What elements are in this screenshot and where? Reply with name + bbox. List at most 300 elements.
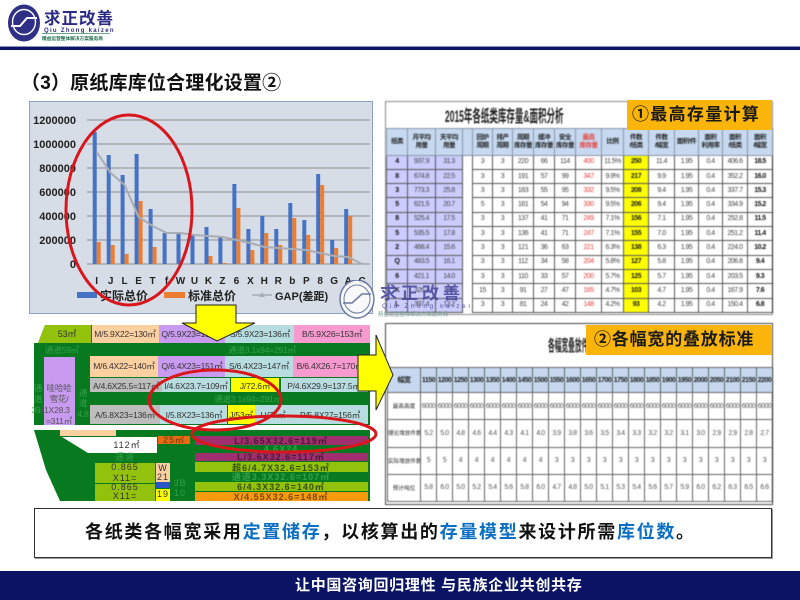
stacking standard table: 3	[747, 457, 750, 464]
storage analysis table: 件数	[656, 134, 668, 141]
stacking standard table: 1250	[454, 377, 467, 384]
stacking standard table: 4.8	[568, 484, 577, 491]
storage analysis table: 用量	[443, 142, 455, 149]
category labels: G	[330, 276, 338, 287]
storage analysis table: 71	[562, 215, 568, 222]
stacking standard table: 1350	[486, 377, 499, 384]
stacking standard table: 5.6	[504, 484, 513, 491]
storage analysis table: 217	[631, 172, 641, 180]
title: （3）原纸库库位合理化设置②	[21, 73, 281, 94]
storage analysis table: 8	[395, 215, 399, 222]
floor plan: upper section: J/53㎡	[229, 410, 253, 420]
storage analysis table: 0.4	[706, 273, 715, 280]
storage analysis table: 7.1	[657, 215, 666, 222]
storage analysis table: 773.3	[414, 187, 429, 194]
stacking standard table: 6000	[422, 403, 435, 410]
storage analysis table: 5.7%	[606, 273, 619, 280]
storage analysis table: 483.5	[414, 258, 429, 265]
stacking standard table: 6000	[454, 403, 467, 410]
storage analysis table: 面积	[704, 134, 716, 141]
storage analysis table: 5	[395, 230, 399, 237]
table panel: stacking standard	[386, 324, 772, 504]
stacking standard table: 2.9	[712, 430, 721, 437]
category labels: H	[261, 276, 268, 287]
storage analysis table: 468.4	[414, 244, 429, 251]
storage analysis table	[385, 127, 774, 314]
storage analysis table: 0.4	[706, 158, 715, 165]
storage analysis table: 114	[560, 158, 570, 165]
stacking standard table: 3.8	[568, 430, 577, 437]
storage analysis table: 面积/件	[677, 138, 696, 145]
storage analysis table: 15	[479, 287, 486, 294]
storage analysis table: 203.5	[727, 273, 743, 280]
GAP line	[97, 152, 362, 264]
stacking standard table: 5.3	[616, 484, 625, 491]
stacking standard table: 6.0	[696, 484, 705, 491]
storage analysis table: 7.1%	[606, 230, 619, 237]
storage analysis table: 525.4	[414, 215, 429, 222]
floor plan: upper section: S/5.9X23=136㎡	[230, 329, 291, 339]
stacking standard table: 最高高度	[393, 404, 415, 410]
storage analysis table: /纸类	[629, 142, 643, 149]
storage analysis table: 3	[481, 215, 484, 222]
floor plan: upper section: M/5.9X22=130㎡	[94, 329, 156, 339]
stacking standard table: 2200	[758, 377, 771, 384]
floor plan: upper section: A/4.6X25.5=117㎡	[93, 381, 160, 391]
storage analysis table: 58	[562, 258, 568, 265]
floor plan: lower section	[34, 430, 370, 502]
storage analysis table: 204	[583, 258, 594, 265]
stacking standard table: 1650	[582, 377, 595, 384]
stacking standard table: 3.6	[584, 430, 593, 437]
category labels: 6	[234, 276, 240, 287]
table title: 2015年各纸类库存量&面积分析	[445, 107, 564, 126]
storage analysis table: 621.5	[414, 201, 429, 208]
stacking standard table: 1400	[502, 377, 515, 384]
storage analysis table: 57	[541, 172, 547, 180]
legend	[77, 288, 328, 303]
storage analysis table: 14.0	[443, 273, 455, 280]
floor plan: lower section: L/3.6X32.6=117㎡	[237, 452, 325, 462]
storage analysis table: 47	[562, 287, 568, 294]
stacking standard table: 4.8	[456, 430, 465, 437]
category labels	[95, 276, 366, 287]
storage analysis table: 3	[501, 201, 504, 208]
storage analysis table: 9.5%	[606, 201, 619, 208]
floor plan: lower section: X11=	[113, 491, 137, 501]
storage analysis table: L	[395, 301, 399, 308]
category labels: U	[191, 276, 198, 287]
floor plan: upper section: U/7x㎡	[261, 410, 286, 420]
storage analysis table: 6.3	[657, 244, 666, 251]
stacking standard table: 6000	[566, 403, 579, 410]
stacking standard table: 5.1	[600, 484, 609, 491]
callout: stacking standard by width: ②各幅宽的叠放标准	[594, 330, 754, 349]
storage analysis table: 3	[501, 273, 504, 280]
floor plan: lower section: W	[158, 463, 168, 473]
stacking standard table: 5.0	[456, 484, 465, 491]
storage analysis table: 3	[501, 230, 504, 237]
stacking standard table: 6.0	[440, 484, 449, 491]
storage analysis table: 110	[518, 273, 528, 280]
floor plan: upper section: I/5.8X23=136㎡	[166, 410, 223, 420]
storage analysis table: 397.4	[414, 301, 429, 308]
floor plan: lower section: 通道3.3X32.6=107㎡	[232, 471, 330, 482]
storage analysis table: 0.4	[706, 258, 715, 265]
storage analysis table: 1.95	[681, 287, 692, 294]
storage analysis table: 220	[518, 158, 528, 165]
stacking standard table: 3.2	[664, 430, 673, 437]
storage analysis table: 352.2	[727, 172, 743, 180]
storage analysis table: 3	[481, 244, 484, 251]
storage analysis table: 6	[395, 273, 399, 280]
storage analysis table: 9.9%	[606, 172, 619, 180]
storage analysis table: 103	[631, 287, 641, 294]
storage analysis table: /幅宽	[753, 142, 767, 149]
storage analysis table: 138	[631, 244, 641, 251]
floor plan: upper section: 道	[34, 394, 43, 404]
storage analysis table: 5.8	[657, 258, 666, 265]
stacking standard table: 6.2	[712, 484, 721, 491]
storage analysis table: 125	[631, 273, 641, 280]
stacking standard table: 6000	[662, 403, 675, 410]
storage analysis table: 面积	[729, 134, 741, 141]
storage analysis table: 4	[395, 158, 399, 165]
stacking standard table: 6000	[710, 403, 723, 410]
stacking standard table: 2.9	[728, 430, 737, 437]
storage analysis table: 7.1%	[606, 215, 619, 222]
storage analysis table: 91	[520, 287, 526, 294]
category labels: X	[247, 276, 254, 287]
storage analysis table: 208	[631, 187, 641, 194]
storage analysis table: 15.2	[754, 201, 766, 208]
storage analysis table: 155	[631, 230, 641, 237]
stacking standard table: 3	[651, 457, 654, 464]
callout: stacking standard by width	[586, 325, 772, 355]
storage analysis table: 183	[518, 187, 528, 194]
storage analysis table: 165	[583, 287, 594, 294]
y axis labels: 1000000	[33, 139, 76, 151]
header logo: Qiu Zhong kaizen	[44, 28, 115, 34]
storage analysis table: 1.95	[681, 187, 692, 194]
floor plan: lower section: 0.865	[111, 482, 139, 492]
floor plan: upper section: B/5.9X26=153㎡	[302, 329, 363, 339]
storage analysis table: 22.5	[443, 172, 455, 180]
storage analysis table: 0.4	[706, 201, 715, 208]
floor plan: upper section: S/6.4X23=147㎡	[229, 361, 290, 371]
stacking standard table: 5.2	[424, 430, 433, 437]
stacking standard table: 4	[539, 457, 542, 464]
y axis labels: 0	[70, 259, 76, 271]
floor plan: upper section: 通道3.1x94=291㎡	[214, 394, 282, 404]
storage analysis table: 9.4	[657, 201, 666, 208]
legend: GAP(差距)	[275, 289, 328, 303]
storage analysis table: 34	[541, 258, 547, 265]
storage analysis table: 1.95	[681, 244, 692, 251]
storage analysis table: 纸类	[391, 138, 403, 145]
storage analysis table: 库存量	[556, 142, 574, 149]
stacking standard table: 4	[459, 457, 462, 464]
summary text box: 各纸类各幅宽采用定置储存，以核算出的存量模型来设计所需库位数。	[85, 522, 696, 542]
storage analysis table: 25.8	[443, 187, 455, 194]
category labels: L	[122, 276, 128, 287]
stacking standard table: 6000	[742, 403, 755, 410]
floor plan: lower section: X/4.55X32.6=148㎡	[234, 492, 328, 502]
storage analysis table: 3	[481, 273, 484, 280]
stacking standard table: 3	[635, 457, 638, 464]
storage analysis table: 127	[631, 258, 641, 265]
floor plan: upper section: 通道3.1x94=291㎡	[228, 345, 296, 355]
floor plan: lower section: 21	[157, 472, 169, 482]
stacking standard table: 5.8	[424, 484, 433, 491]
stacking standard table: 3.4	[616, 430, 625, 437]
storage analysis table: 10.9	[443, 287, 455, 294]
watermark logo: 求正改善	[380, 284, 464, 303]
stacking standard table: 3	[571, 457, 574, 464]
storage analysis table: 156	[631, 215, 641, 222]
storage analysis table: 0.4	[706, 287, 715, 294]
storage analysis table: 93	[633, 301, 639, 308]
legend: 实际总价	[100, 288, 148, 303]
storage analysis table: 2	[395, 244, 399, 251]
y axis labels: 800000	[39, 163, 76, 175]
storage analysis table: 167.9	[727, 287, 743, 294]
category labels: b	[289, 276, 295, 287]
stacking standard table: 1200	[438, 377, 451, 384]
storage analysis table: 周期	[496, 142, 508, 149]
storage analysis table: 95	[562, 187, 568, 194]
stacking standard table: 1550	[550, 377, 563, 384]
bay: purple block: 雪花/	[50, 394, 69, 404]
storage analysis table: 535.5	[414, 230, 429, 237]
stacking standard table: 5.4	[488, 484, 497, 491]
stacking standard table: 5.6	[648, 484, 657, 491]
stacking standard table: 3	[667, 457, 670, 464]
stacking standard table: 1900	[662, 377, 675, 384]
category labels: 8	[317, 276, 323, 287]
stacking standard table: 3.3	[632, 430, 641, 437]
storage analysis table: 334.9	[727, 201, 743, 208]
stacking standard table: 5.2	[472, 484, 481, 491]
stacking standard table: 3	[715, 457, 718, 464]
floor plan: lower section: X11=	[113, 473, 137, 483]
floor plan: lower section: 10	[174, 488, 186, 498]
storage analysis table: 63	[562, 244, 568, 251]
stacking standard table: 1700	[598, 377, 611, 384]
storage analysis table: 5	[481, 201, 484, 208]
stacking standard table: 1800	[630, 377, 643, 384]
bay: 53 ㎡	[38, 325, 91, 343]
stacking standard table: 5.9	[680, 484, 689, 491]
summary text box	[34, 508, 772, 558]
storage analysis table: 206.8	[727, 258, 743, 265]
bar chart panel	[30, 102, 372, 313]
category labels: C	[358, 276, 366, 287]
storage analysis table: 3	[501, 172, 504, 180]
storage analysis table: 库存量	[514, 142, 532, 149]
storage analysis table: 4.2%	[606, 301, 619, 308]
watermark logo: 精益运营整体解决方案服务商	[378, 310, 449, 318]
stacking standard table: 4	[475, 457, 478, 464]
stacking standard table	[386, 366, 774, 503]
storage analysis table: 42	[562, 301, 568, 308]
storage analysis table: 9.4	[657, 187, 666, 194]
storage analysis table: 比例	[606, 138, 618, 145]
category labels: R	[275, 276, 283, 287]
storage analysis table: 1.95	[681, 258, 692, 265]
floor plan: lower section: 0.865	[111, 462, 139, 472]
storage analysis table: 1.95	[681, 215, 692, 222]
floor plan: lower section: 通道	[115, 451, 135, 462]
storage analysis table: 4.7%	[606, 287, 619, 294]
storage analysis table: 221	[583, 244, 594, 251]
floor plan: lower section: 3B	[173, 478, 187, 488]
storage analysis table: 1.95	[681, 158, 692, 165]
floor plan: upper section: Q/6.4X23=151㎡	[162, 361, 223, 371]
stacking standard table: 6000	[614, 403, 627, 410]
y axis labels: 600000	[39, 187, 76, 199]
stacking standard table: 2000	[694, 377, 707, 384]
storage analysis table: 0.4	[706, 187, 715, 194]
storage analysis table: 17.8	[443, 230, 455, 237]
storage analysis table: 7.6	[756, 287, 764, 294]
storage analysis table: 缓冲	[538, 134, 550, 141]
storage analysis table: 71	[562, 230, 568, 237]
standard total bars	[97, 185, 352, 264]
stacking standard table: 幅宽	[398, 377, 410, 384]
storage analysis table: 安全	[559, 134, 571, 141]
stacking standard table: 3	[699, 457, 702, 464]
storage analysis table: 121	[518, 244, 528, 251]
stacking standard table: 3.9	[552, 430, 561, 437]
floor plan: upper section: P/4.6X29.9=137.5㎡	[287, 381, 361, 391]
storage analysis table: 11.4	[754, 230, 766, 237]
category labels: I	[95, 276, 98, 287]
storage analysis table: 20.7	[443, 201, 455, 208]
floor plan: upper section: P/5.8X27=156㎡	[300, 410, 361, 420]
storage analysis table: 3	[501, 301, 504, 308]
storage analysis table: /幅宽	[655, 142, 668, 149]
storage analysis table: Q	[395, 258, 399, 265]
storage analysis table: 16.0	[754, 172, 766, 180]
floor plan: upper section: Q/5.9X23=136㎡	[162, 329, 223, 339]
footer bar	[0, 571, 800, 600]
floor plan: upper section: J/72.6㎡	[240, 381, 271, 391]
storage analysis table: 0.4	[706, 172, 715, 180]
floor plan: upper section: 通道59㎡	[45, 345, 80, 355]
floor plan: lower section: 25㎡	[163, 435, 185, 445]
category labels: f	[165, 276, 169, 287]
stacking standard table: 2150	[742, 377, 755, 384]
bay: purple block: 11X28.3	[40, 405, 70, 415]
stacking standard table: 5.0	[440, 430, 449, 437]
stacking standard table: 6000	[438, 403, 451, 410]
storage analysis table: 16.1	[443, 258, 455, 265]
stacking standard table: 6000	[534, 403, 547, 410]
storage analysis table: 5.8%	[606, 258, 619, 265]
stacking standard table: 2.8	[744, 430, 753, 437]
stacking standard table: 3	[731, 457, 734, 464]
storage analysis table: 252.8	[727, 215, 743, 222]
storage analysis table: 周期	[517, 134, 529, 141]
storage analysis table: 0.4	[706, 215, 715, 222]
floor plan: upper section: 4.8	[77, 409, 89, 419]
storage analysis table: 5	[395, 201, 399, 208]
storage analysis table: 1.95	[681, 172, 692, 180]
storage analysis table: 1.95	[681, 230, 692, 237]
storage analysis table: 200	[583, 273, 594, 280]
storage analysis table: 3	[481, 301, 484, 308]
stacking standard table: 4	[507, 457, 510, 464]
stacking standard table: 1300	[470, 377, 483, 384]
category labels: K	[205, 276, 213, 287]
storage analysis table: 7.0	[657, 230, 666, 237]
floor plan: upper section: B/6.4X26.7=170㎡	[297, 361, 364, 371]
storage analysis table: 月平均	[412, 134, 430, 141]
storage analysis table: 3	[501, 158, 504, 165]
storage analysis table: 24	[541, 301, 547, 308]
storage analysis table: 99	[562, 172, 568, 180]
floor plan: upper section: 通	[34, 383, 43, 393]
floor plan: upper section: 39	[31, 405, 41, 415]
stacking standard table: 1450	[518, 377, 531, 384]
storage analysis table: 937.9	[414, 158, 429, 165]
callout: maximum stock calculation	[627, 100, 772, 130]
stacking standard table: 5.0	[584, 484, 593, 491]
storage analysis table: 回炉	[476, 134, 488, 141]
stacking standard table: 5.8	[520, 484, 529, 491]
storage analysis table: 件数	[630, 134, 642, 141]
storage analysis table: 0.4	[706, 244, 715, 251]
stacking standard table: 6000	[550, 403, 563, 410]
stacking standard table: 6000	[630, 403, 643, 410]
arrow: down to floor plan	[182, 304, 256, 342]
storage analysis table: 4.2	[657, 301, 666, 308]
storage analysis table: 326.4	[414, 287, 429, 294]
storage analysis table: 206	[631, 201, 641, 208]
storage analysis table: 4.7	[657, 287, 666, 294]
storage analysis table: 3	[481, 158, 484, 165]
storage analysis table: 排产	[496, 134, 508, 141]
stacking standard table: 6000	[758, 403, 771, 410]
storage analysis table: 13.2	[443, 301, 455, 308]
stacking standard table: 6000	[518, 403, 531, 410]
storage analysis table: 137	[518, 215, 528, 222]
stacking standard table: 4.0	[536, 430, 545, 437]
storage analysis table: 250	[631, 158, 641, 165]
storage analysis table: 11.4	[656, 158, 667, 165]
storage analysis table: 36	[541, 244, 547, 251]
red ellipse: L bays	[190, 414, 378, 454]
storage analysis table: 31.3	[443, 158, 455, 165]
y axis labels: 1200000	[33, 115, 76, 127]
red ellipse: highest chart bars	[64, 114, 194, 306]
header logo	[8, 4, 115, 42]
storage analysis table: 15.3	[754, 187, 766, 194]
storage analysis table: 10.2	[754, 244, 766, 251]
category labels: P	[303, 276, 310, 287]
stacking standard table: 3	[763, 457, 766, 464]
storage analysis table: 191	[518, 172, 528, 180]
stacking standard table: 1950	[678, 377, 691, 384]
stacking standard table: 1500	[534, 377, 547, 384]
storage analysis table: 148	[583, 301, 594, 308]
actual total bars	[93, 132, 348, 264]
storage analysis table: 347	[583, 172, 594, 180]
storage analysis table: 18.5	[754, 158, 766, 165]
stacking standard table: 5.7	[664, 484, 673, 491]
storage analysis table: 3	[501, 287, 504, 294]
